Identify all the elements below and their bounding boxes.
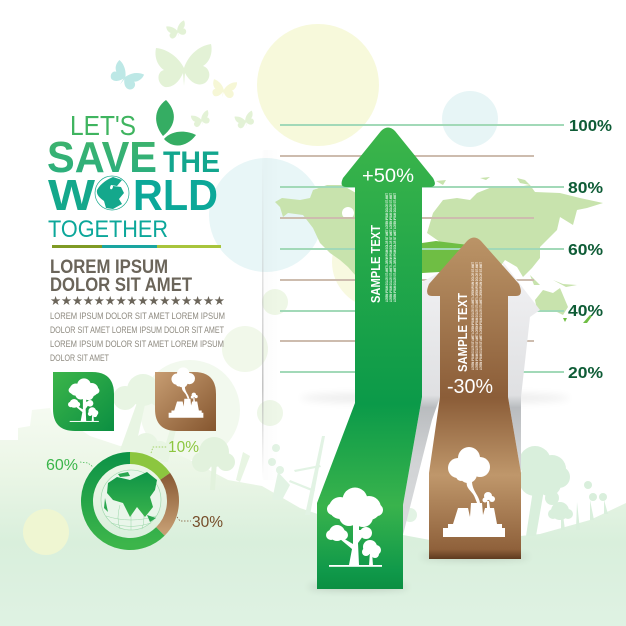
title line: SAVE: SAVE (47, 133, 157, 182)
label: 30%: 30% (192, 514, 223, 531)
butterfly: blue (108, 58, 144, 93)
fine print: LOREM IPSUM DOLOR SIT AMET LOREM IPSUM DOLOR SIT AMET LOREM IPSUM DOLOR SIT AMET (389, 193, 393, 302)
body text: DOLOR SIT AMET LOREM IPSUM DOLOR SIT AMET (50, 325, 224, 336)
wind turbines and trees behind arrows (268, 436, 417, 522)
heading: lorem ipsum (50, 257, 192, 296)
segment: 30% brown (160, 476, 173, 531)
leader lines (80, 447, 191, 521)
butterfly: yellow (210, 77, 237, 100)
icon tile: factory (155, 367, 216, 431)
arctic islands (436, 177, 530, 185)
title (47, 100, 220, 243)
southeast asia (530, 275, 577, 287)
title line: WORLD: RLD (133, 171, 218, 220)
label: 100%: 100% (569, 118, 612, 135)
globe (101, 470, 161, 530)
label: 20%: 20% (568, 365, 603, 382)
butterflies (108, 20, 256, 129)
australia (535, 288, 568, 315)
new zealand (563, 315, 592, 323)
fine print: LOREM IPSUM DOLOR SIT AMET LOREM IPSUM DOLOR SIT AMET LOREM IPSUM DOLOR SIT AMET (475, 262, 479, 370)
tree silhouettes, left (113, 374, 250, 490)
butterfly: small top (166, 20, 188, 39)
icon: globe letter O (95, 176, 129, 210)
fold line (262, 150, 280, 480)
body text (50, 311, 225, 364)
fine print: LOREM IPSUM DOLOR SIT AMET LOREM IPSUM DOLOR SIT AMET LOREM IPSUM DOLOR SIT AMET (471, 262, 475, 370)
icon: leaves (156, 100, 196, 146)
green arrow (317, 128, 435, 589)
body text: LOREM IPSUM DOLOR SIT AMET LOREM IPSUM (50, 311, 225, 322)
background circles (140, 24, 498, 460)
hudson bay (342, 207, 354, 219)
icon: tree (326, 488, 383, 567)
value: +50%: +50% (362, 166, 414, 187)
label: sample text: SAMPLE TEXT (368, 225, 383, 303)
value: -30%: -30% (447, 376, 493, 398)
floor shadows (300, 392, 570, 590)
butterfly: large green (155, 44, 212, 87)
tri-colour rule (52, 245, 221, 248)
foreground circle bottom left (23, 509, 69, 555)
axis labels (568, 118, 612, 382)
fine print: LOREM IPSUM DOLOR SIT AMET LOREM IPSUM DOLOR SIT AMET LOREM IPSUM DOLOR SIT AMET (393, 193, 397, 302)
eurasia (427, 185, 603, 277)
africa (422, 241, 470, 273)
label: 40%: 40% (568, 303, 603, 320)
world map (275, 177, 603, 323)
segment: 10% light green (130, 458, 165, 476)
label: 60%: 60% (568, 242, 603, 259)
butterfly: small middle (190, 110, 211, 128)
title line: WORLD (48, 171, 218, 220)
title line: LET'S: LET'S (70, 110, 136, 141)
donut chart (46, 439, 223, 544)
icon tile: tree (53, 372, 114, 431)
arrow fold shadows (403, 262, 540, 535)
grid lines (280, 125, 564, 372)
landscape silhouette (0, 374, 626, 626)
segment: 60% green (87, 458, 160, 544)
brown arrow (427, 238, 521, 559)
north america (275, 185, 356, 276)
fine print (471, 262, 483, 370)
label: 60%: 60% (46, 457, 78, 474)
fine print (385, 193, 397, 302)
tree silhouettes, right (519, 446, 608, 536)
fine print: LOREM IPSUM DOLOR SIT AMET LOREM IPSUM DOLOR SIT AMET LOREM IPSUM DOLOR SIT AMET (385, 193, 389, 302)
title line: WORLD: W (48, 171, 96, 220)
heading: lorem ipsum: LOREM IPSUM (50, 257, 168, 278)
label: 10%: 10% (168, 439, 199, 456)
label: sample text: SAMPLE TEXT (455, 293, 470, 372)
title line: THE: THE (163, 146, 220, 179)
body text: LOREM IPSUM DOLOR SIT AMET LOREM IPSUM (50, 339, 224, 350)
icon: factory (443, 447, 505, 537)
star row: ★★★★★★★★★★★★★★★★ (50, 293, 225, 308)
body text: DOLOR SIT AMET (50, 353, 109, 364)
heading: lorem ipsum: DOLOR SIT AMET (50, 275, 192, 296)
butterfly: small right (234, 111, 256, 129)
label: 80%: 80% (568, 180, 603, 197)
fine print: LOREM IPSUM DOLOR SIT AMET LOREM IPSUM DOLOR SIT AMET LOREM IPSUM DOLOR SIT AMET (479, 262, 483, 370)
title line: TOGETHER: TOGETHER (48, 216, 168, 243)
